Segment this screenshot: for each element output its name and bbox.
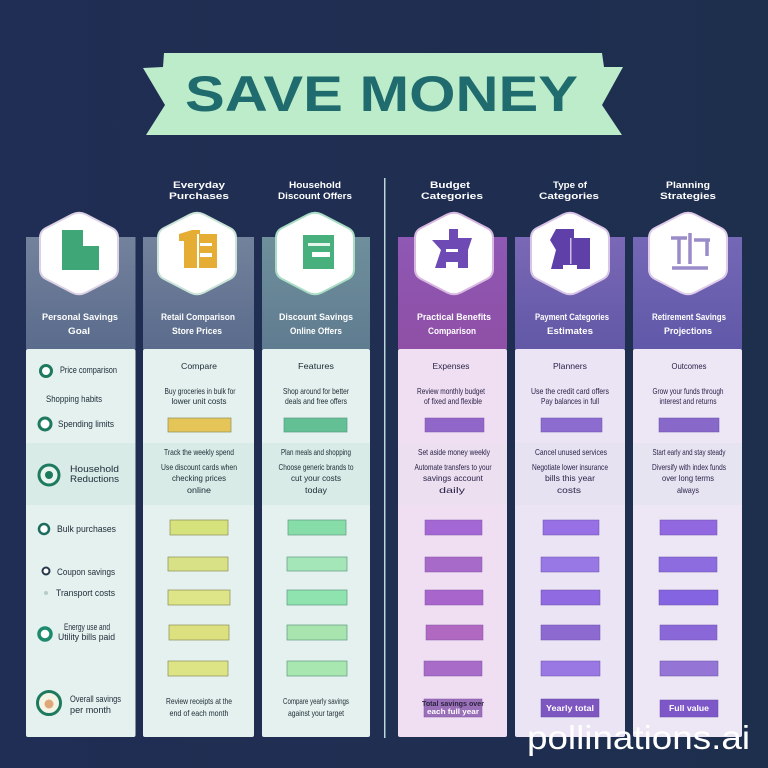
body text: over long terms [662, 473, 714, 483]
body text: Set aside money weekly [418, 447, 491, 457]
body text: deals and free offers [285, 396, 347, 406]
body text: checking prices [172, 473, 226, 483]
icon: green document in hexagon [276, 213, 354, 294]
body text: online [187, 485, 211, 495]
body text: Automate transfers to your [414, 462, 492, 472]
header text: Store Prices [172, 326, 222, 337]
panel: column 1 savings labels [26, 213, 136, 737]
header text: Online Offers [290, 326, 342, 337]
bars [284, 418, 347, 676]
row labels: Price comparison [60, 365, 117, 375]
body text: Planners [553, 361, 587, 371]
title: SAVE MONEY [185, 66, 578, 122]
body text: bills this year [545, 473, 595, 483]
panel: column 4 [398, 213, 507, 737]
body text: Track the weekly spend [164, 447, 234, 457]
header text: Goal [68, 326, 90, 337]
column headings: Household [289, 180, 341, 191]
body text: savings account [423, 473, 484, 483]
row labels: Energy use and [64, 622, 110, 632]
row labels: per month [70, 705, 111, 715]
panel: column 5 [515, 213, 625, 737]
bar text: Full value [669, 704, 710, 713]
body text: Start early and stay steady [652, 447, 726, 457]
central divider [384, 178, 386, 738]
row labels: Utility bills paid [58, 632, 115, 642]
body text: Compare [181, 361, 217, 371]
column headings: Everyday [173, 180, 226, 191]
row labels: Shopping habits [46, 394, 102, 404]
body text: Plan meals and shopping [281, 447, 351, 457]
header text [535, 312, 609, 337]
bar text: Yearly total [546, 704, 594, 713]
column headings: Categories [421, 191, 483, 202]
body text: always [677, 485, 699, 495]
header text: Retail Comparison [161, 312, 235, 323]
body text: cut your costs [291, 473, 341, 483]
body text: Review receipts at the [166, 696, 232, 706]
column headings [169, 180, 716, 202]
column headings: Budget [430, 180, 471, 191]
header text: Discount Savings [279, 312, 353, 323]
body text [414, 361, 492, 495]
header text [652, 312, 726, 337]
body text: daily [439, 485, 466, 495]
body text: Buy groceries in bulk for [164, 386, 236, 396]
body text: Compare yearly savings [283, 696, 349, 706]
body text [531, 361, 609, 495]
header text [42, 312, 118, 337]
bars [659, 418, 719, 717]
body text: interest and returns [660, 396, 716, 406]
panel: column 3 [262, 213, 370, 737]
header text [417, 312, 491, 337]
header text [279, 312, 353, 337]
header text [161, 312, 235, 337]
icon: purple puzzle in hexagon [531, 213, 609, 294]
body text: Cancel unused services [535, 447, 607, 457]
header text: Comparison [428, 326, 476, 337]
bar text [422, 699, 484, 716]
body text: of fixed and flexible [424, 396, 482, 406]
body text: end of each month [170, 708, 229, 718]
icon: green tag in hexagon [40, 213, 118, 294]
body text [652, 361, 726, 495]
body text [278, 361, 354, 718]
column headings: Strategies [660, 191, 716, 202]
body text: Pay balances in full [541, 396, 599, 406]
column headings: Type of [553, 180, 588, 191]
column headings: Categories [539, 191, 599, 202]
body text: Grow your funds through [652, 386, 724, 396]
icon: purple figure in hexagon [415, 213, 493, 294]
row labels: Coupon savings [57, 567, 115, 577]
header text: Projections [664, 326, 712, 337]
body text: Review monthly budget [417, 386, 485, 396]
watermark: pollinations.ai [527, 719, 750, 756]
bars [168, 418, 231, 676]
header text: Personal Savings [42, 312, 118, 323]
column headings: Purchases [169, 191, 229, 202]
body text: Use discount cards when [161, 462, 237, 472]
body text: Outcomes [672, 361, 706, 371]
body text: Negotiate lower insurance [532, 462, 608, 472]
column headings: Discount Offers [278, 191, 352, 202]
row labels: Spending limits [58, 419, 114, 429]
body text: Choose generic brands to [278, 462, 354, 472]
column headings: Planning [666, 180, 710, 191]
body text: today [305, 485, 328, 495]
row labels: Transport costs [56, 588, 115, 598]
bars [541, 418, 602, 717]
bar text: each full year [427, 707, 479, 716]
body text [161, 361, 237, 718]
body text: Diversify with index funds [652, 462, 726, 472]
header text: Payment Categories [535, 312, 609, 323]
title ribbon [143, 53, 623, 135]
row labels: Bulk purchases [57, 524, 116, 534]
bar text: Total savings over [422, 699, 484, 708]
body text: Expenses [432, 361, 470, 371]
body text: Use the credit card offers [531, 386, 609, 396]
header text: Estimates [547, 326, 593, 337]
body text: Features [298, 361, 334, 371]
body text: lower unit costs [172, 396, 226, 406]
icon: lavender chart in hexagon [649, 213, 727, 294]
header text: Practical Benefits [417, 312, 491, 323]
header text: Retirement Savings [652, 312, 726, 323]
body text: against your target [288, 708, 345, 718]
body text: Shop around for better [283, 386, 349, 396]
icon: yellow building in hexagon [158, 213, 236, 294]
body text: costs [557, 485, 581, 495]
panel: column 2 [143, 213, 254, 737]
bars [424, 418, 484, 717]
row labels: Household [70, 464, 119, 474]
row labels: Overall savings [70, 694, 121, 704]
panel: column 6 [633, 213, 742, 737]
row labels: Reductions [70, 474, 120, 484]
row labels [38, 365, 121, 715]
